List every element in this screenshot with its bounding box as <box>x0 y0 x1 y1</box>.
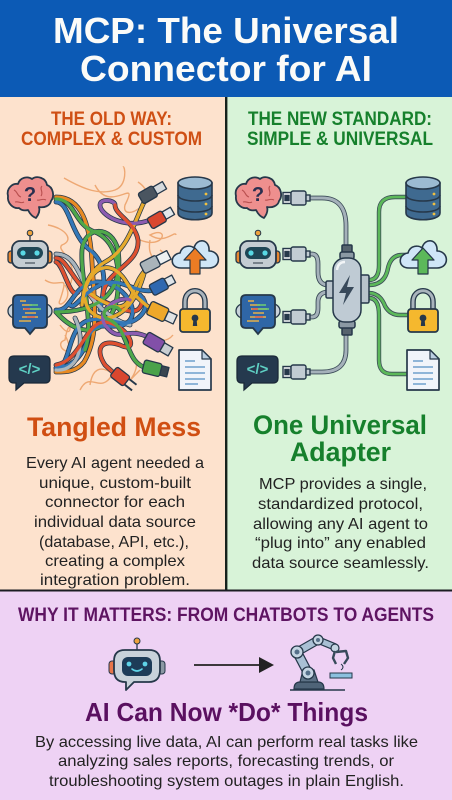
icon: brain <box>236 177 281 218</box>
icon: code bubble <box>9 356 50 390</box>
tangled cables <box>56 197 155 375</box>
subheading: tangled mess: Tangled Mess <box>27 412 201 442</box>
text block: why it matters body: troubleshooting system outages in plain English. <box>49 773 404 790</box>
background scribbles <box>45 167 176 390</box>
icon: robot <box>236 230 280 268</box>
icon: code bubble <box>237 356 278 390</box>
text block: new standard body: MCP provides a single, <box>259 476 427 493</box>
panel: header <box>0 0 452 97</box>
icon: document <box>407 350 439 390</box>
title: Connector for AI <box>80 48 372 89</box>
text block: old way body: creating a complex <box>45 553 185 570</box>
subheading: one universal adapter <box>253 410 427 467</box>
title <box>53 10 399 89</box>
title: MCP: The Universal <box>53 10 399 51</box>
icon: code agent <box>8 295 52 334</box>
text block: why it matters body <box>35 734 418 790</box>
green cables <box>369 197 408 374</box>
panel: why it matters <box>0 590 452 800</box>
icon: padlock <box>180 291 210 332</box>
icon: robot <box>8 230 52 268</box>
heading: old way: COMPLEX & CUSTOM <box>21 129 202 150</box>
icon: brain: ? <box>252 184 264 206</box>
text block: why it matters body: By accessing live data, AI can perform real tasks like <box>35 734 418 751</box>
icon: brain: ? <box>24 184 36 206</box>
icon: cloud upload <box>400 241 446 274</box>
plugs <box>110 180 178 392</box>
text block: new standard body <box>252 476 429 572</box>
heading: new standard: SIMPLE & UNIVERSAL <box>247 129 433 150</box>
usb connectors <box>283 191 310 379</box>
text block: old way body <box>26 455 204 589</box>
icon: brain <box>8 177 53 218</box>
text block: old way body: connector for each <box>45 494 185 511</box>
subheading: one universal adapter: Adapter <box>290 437 391 467</box>
heading: new standard: THE NEW STANDARD: <box>248 109 432 130</box>
text block: old way body: unique, custom-built <box>39 475 192 492</box>
text block: old way body: individual data source <box>34 514 196 531</box>
text block: old way body: (database, API, etc.), <box>39 534 189 551</box>
heading: old way <box>21 109 202 150</box>
icon: chatbot <box>109 638 165 690</box>
text block: new standard body: standardized protocol, <box>258 496 423 513</box>
subheading: ai can now do things: AI Can Now *Do* Things <box>85 697 368 727</box>
subheading: one universal adapter: One Universal <box>253 410 427 440</box>
text block: old way body: integration problem. <box>40 572 190 589</box>
icon: padlock <box>408 291 438 332</box>
heading: new standard <box>247 109 433 150</box>
icon: code bubble: </> <box>247 361 269 378</box>
text block: old way body: Every AI agent needed a <box>26 455 204 472</box>
universal adapter hub <box>326 245 369 335</box>
icon: document <box>179 350 211 390</box>
text block: new standard body: allowing any AI agent to <box>253 516 428 533</box>
icon: code agent <box>236 295 280 334</box>
text block: new standard body: “plug into” any enabled <box>255 535 426 552</box>
icon: database <box>178 177 212 220</box>
icon: code bubble: </> <box>19 361 41 378</box>
panel: old way <box>0 97 225 591</box>
icon: robot arm <box>290 635 352 690</box>
arrow <box>194 657 274 673</box>
grey cables <box>308 198 346 372</box>
icon: database <box>406 177 440 220</box>
text block: new standard body: data source seamlessly. <box>252 555 429 572</box>
text block: why it matters body: analyzing sales reports, forecasting trends, or <box>58 753 395 770</box>
panel: new standard <box>227 97 452 591</box>
icon: cloud upload <box>172 241 218 274</box>
heading: old way: THE OLD WAY: <box>51 109 172 130</box>
